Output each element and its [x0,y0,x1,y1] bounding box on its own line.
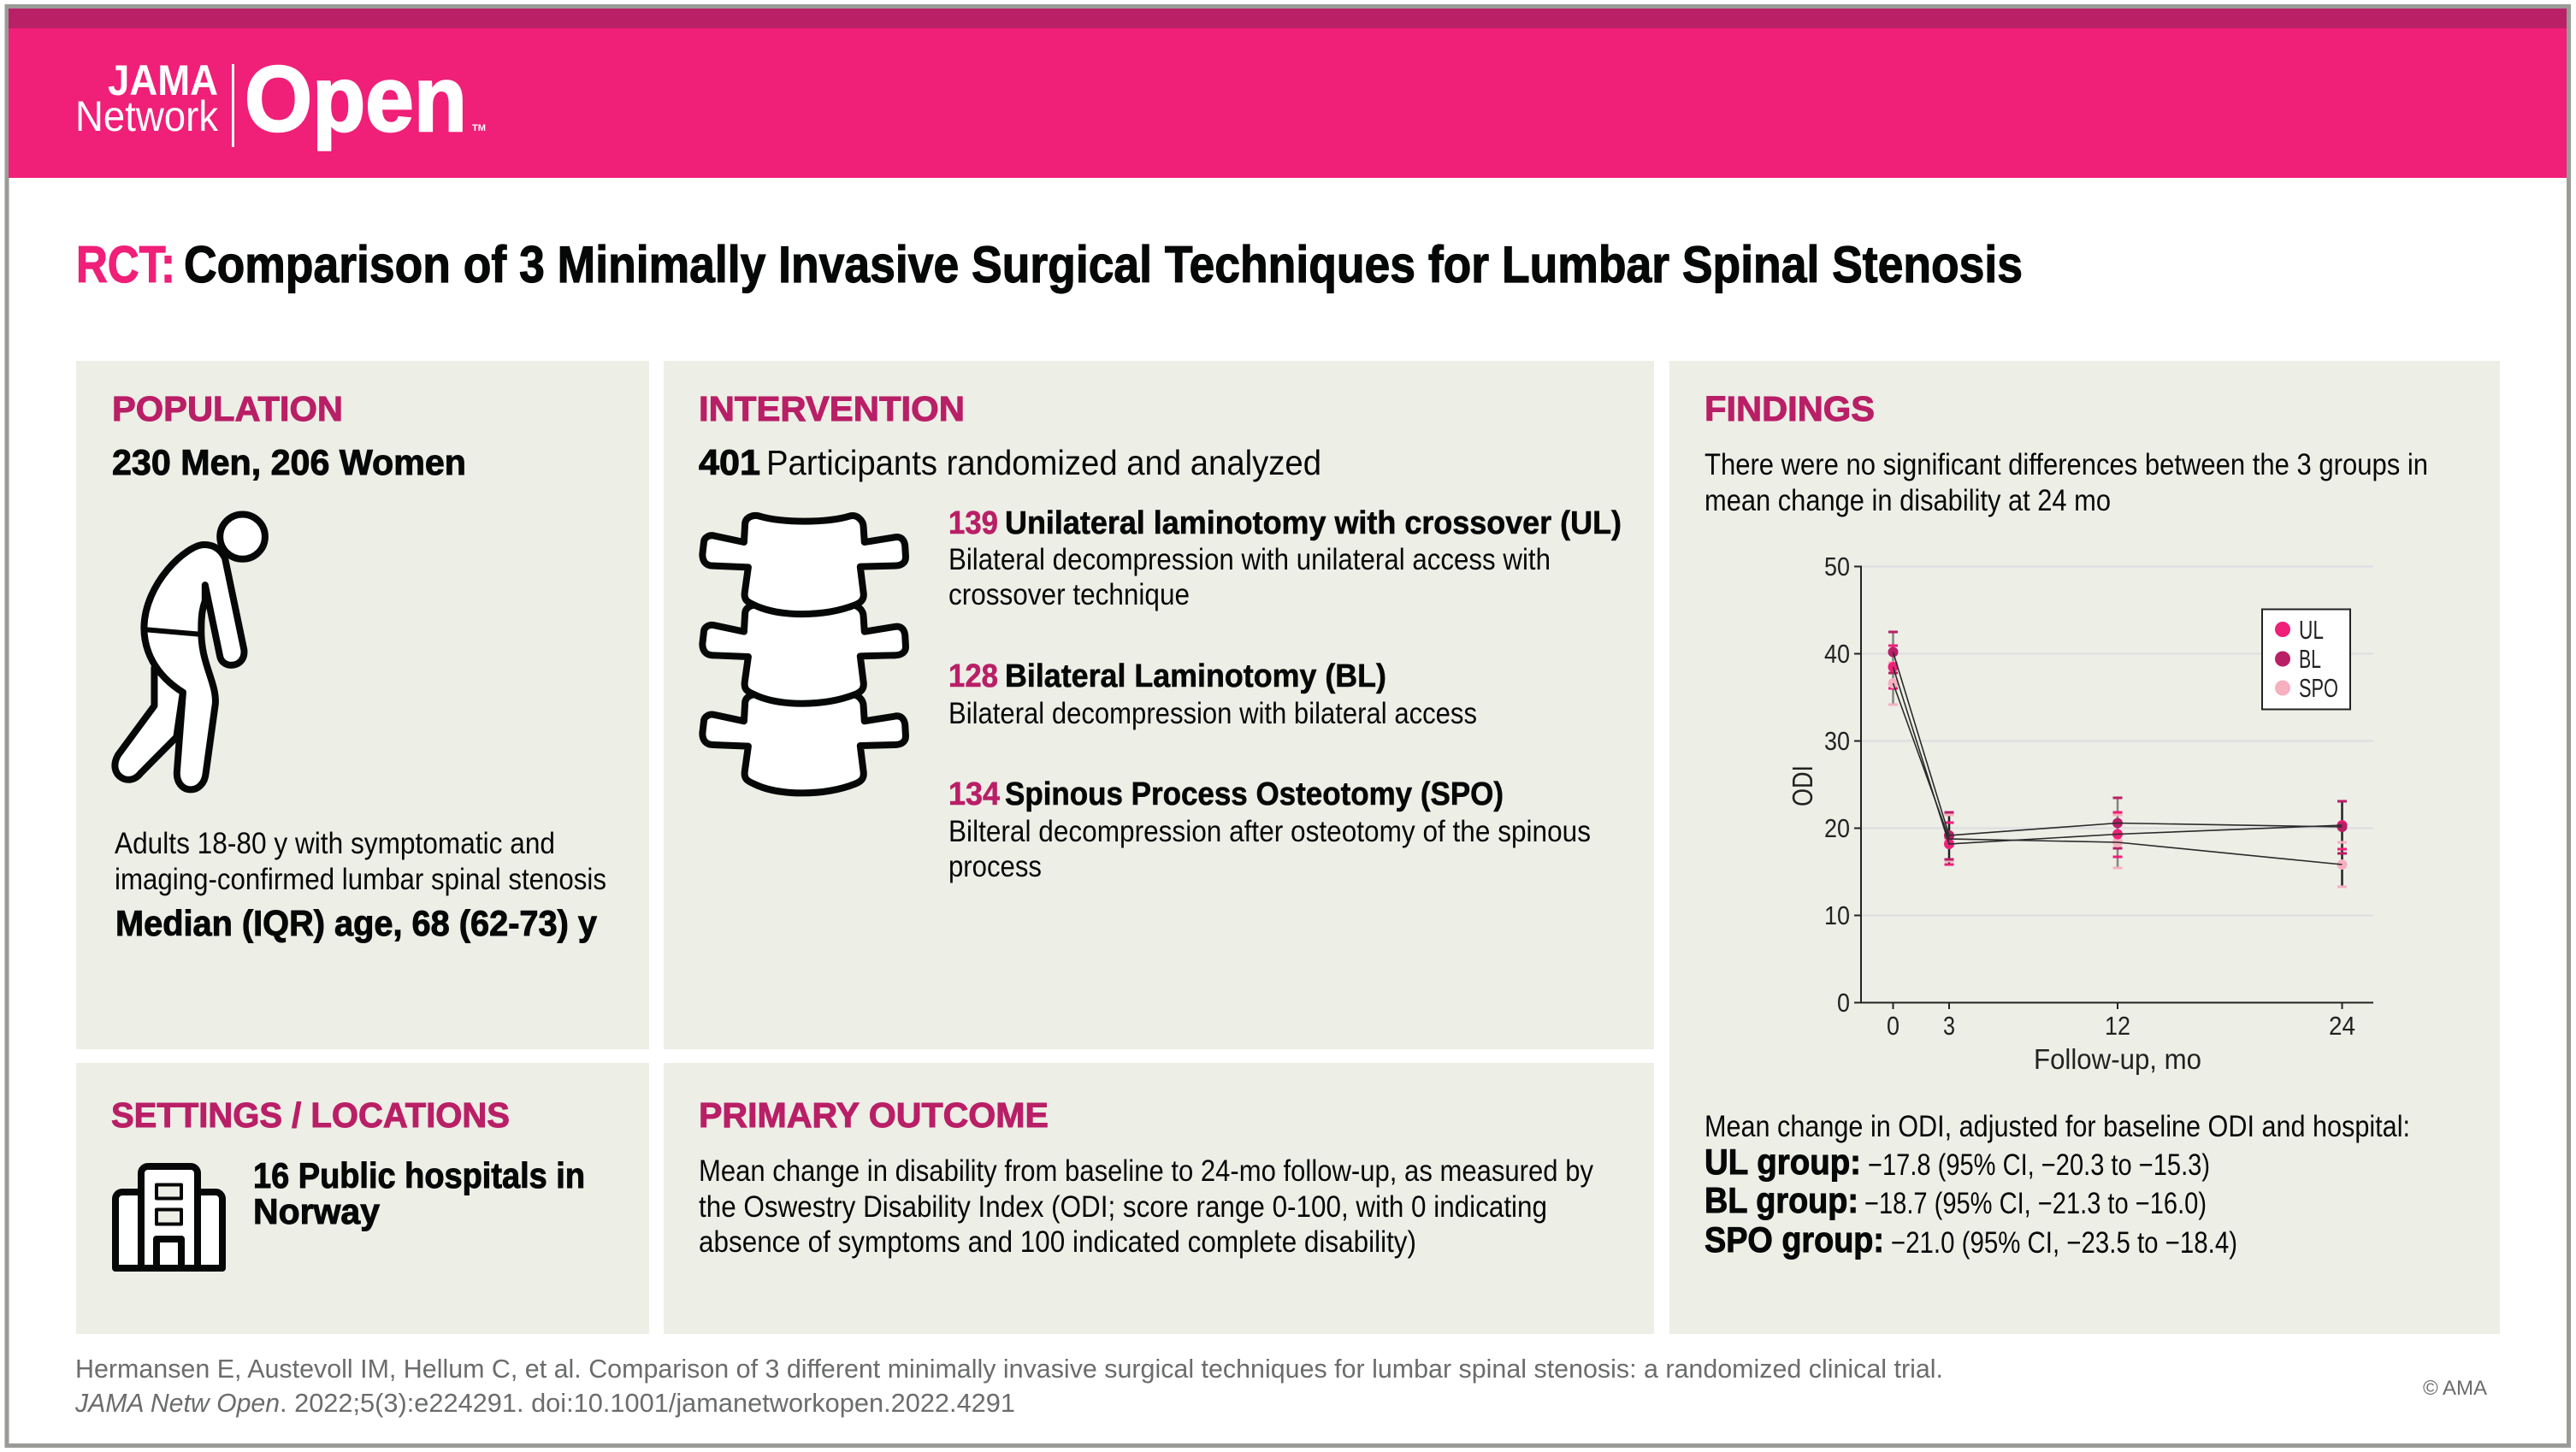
logo: JAMA [108,56,218,104]
title: Comparison of 3 Minimally Invasive Surgical Techniques for Lumbar Spinal Stenosis [184,236,2023,293]
technique: UL [948,505,1622,611]
title: RCT: [76,236,175,293]
technique: UL: Bilateral decompression with unilateral access with [948,543,1551,576]
citation: Hermansen E, Austevoll IM, Hellum C, et al. Comparison of 3 different minimally invasive surgical techniques for lumbar spinal stenosis: a randomized clinical trial. [75,1354,1943,1384]
technique: SPO: process [948,850,1042,883]
x axis labels [1887,1011,2355,1041]
technique: SPO: 134 [948,776,1000,812]
population description: imaging-confirmed lumbar spinal stenosis [115,863,606,896]
technique: SPO [948,776,1591,883]
population description: Adults 18-80 y with symptomatic and [115,827,555,860]
legend: UL [2299,615,2324,645]
primary outcome text: Mean change in disability from baseline to 24-mo follow-up, as measured by [699,1154,1593,1188]
legend [2262,609,2350,710]
logo: Network [75,92,219,140]
technique: UL: Unilateral laminotomy with crossover (UL) [1005,505,1622,541]
mean change results: −17.8 (95% CI, −20.3 to −15.3) [1868,1148,2210,1182]
heading: findings: FINDINGS [1705,389,1875,428]
technique: BL: Bilateral Laminotomy (BL) [1005,658,1386,694]
legend: SPO [2299,673,2338,703]
mean change results [1705,1110,2410,1260]
y axis labels: 20 [1824,813,1850,843]
x axis labels: 0 [1887,1011,1900,1041]
primary outcome text: the Oswestry Disability Index (ODI; score range 0-100, with 0 indicating [699,1190,1547,1224]
mean change results: −21.0 (95% CI, −23.5 to −18.4) [1891,1226,2237,1260]
technique: SPO: Bilteral decompression after osteotomy of the spinous [948,815,1591,848]
technique: BL: 128 [948,658,998,694]
logo: TM [472,123,486,133]
line chart: ODI over follow-up [1787,552,2373,1075]
legend: BL [2299,644,2321,674]
mean change results: BL group: [1705,1180,1858,1220]
icon: hospital building [115,1166,222,1268]
heading: population: POPULATION [112,389,343,428]
population description [115,827,606,896]
panel: primary outcome [664,1063,1654,1334]
panel: findings [1669,361,2500,1334]
citation [74,1354,1943,1418]
x axis labels: 12 [2105,1011,2130,1041]
axis title: ODI: ODI [1787,765,1818,806]
population counts: 230 Men, 206 Women [112,442,466,482]
technique: UL: crossover technique [948,578,1190,611]
icon: stooped person [115,514,265,789]
hospitals text [253,1155,585,1231]
heading: intervention: INTERVENTION [699,389,965,428]
series lines [1894,652,2342,865]
technique: BL: Bilateral decompression with bilateral access [948,697,1477,730]
x axis labels: 3 [1943,1011,1955,1041]
citation: JAMA Netw Open [74,1388,280,1418]
technique: UL: 139 [948,505,998,541]
y axis labels: 30 [1824,726,1850,756]
icon: spine vertebrae [702,516,906,793]
y axis labels: 10 [1824,900,1850,930]
findings summary [1705,448,2428,517]
x axis labels: 24 [2329,1011,2355,1041]
y axis labels [1824,552,1850,1018]
mean change results: Mean change in ODI, adjusted for baseline ODI and hospital: [1705,1110,2410,1143]
data points [1888,646,2347,870]
participants: Participants randomized and analyzed [766,443,1321,482]
axis title: follow-up: Follow-up, mo [2034,1043,2201,1075]
y axis labels: 40 [1824,639,1850,669]
technique: SPO: Spinous Process Osteotomy (SPO) [1005,776,1504,812]
participants: 401 [699,442,760,482]
heading: settings: SETTINGS / LOCATIONS [111,1095,510,1135]
hospitals text: Norway [253,1191,381,1231]
mean change results: SPO group: [1705,1219,1884,1260]
technique: BL [948,658,1477,730]
panel: settings / locations [76,1063,649,1334]
y axis labels: 0 [1837,988,1850,1018]
y axis labels: 50 [1824,552,1850,581]
logo: Open [245,47,467,151]
citation: . 2022;5(3):e224291. doi:10.1001/jamanetworkopen.2022.4291 [280,1388,1015,1418]
header band [9,9,2567,178]
findings summary: mean change in disability at 24 mo [1705,484,2111,517]
median age: Median (IQR) age, 68 (62-73) y [115,903,598,943]
error bars [1888,632,2347,887]
copyright: © AMA [2423,1377,2487,1400]
primary outcome text: absence of symptoms and 100 indicated complete disability) [699,1225,1416,1259]
mean change results: −18.7 (95% CI, −21.3 to −16.0) [1864,1187,2207,1220]
panel: intervention [664,361,1654,1049]
findings summary: There were no significant differences between the 3 groups in [1705,448,2428,481]
mean change results: UL group: [1705,1142,1861,1182]
logo [75,47,486,151]
hospitals text: 16 Public hospitals in [253,1155,585,1195]
panel: population [76,361,649,1049]
primary outcome text [699,1154,1593,1259]
heading: primary outcome: PRIMARY OUTCOME [699,1095,1049,1135]
